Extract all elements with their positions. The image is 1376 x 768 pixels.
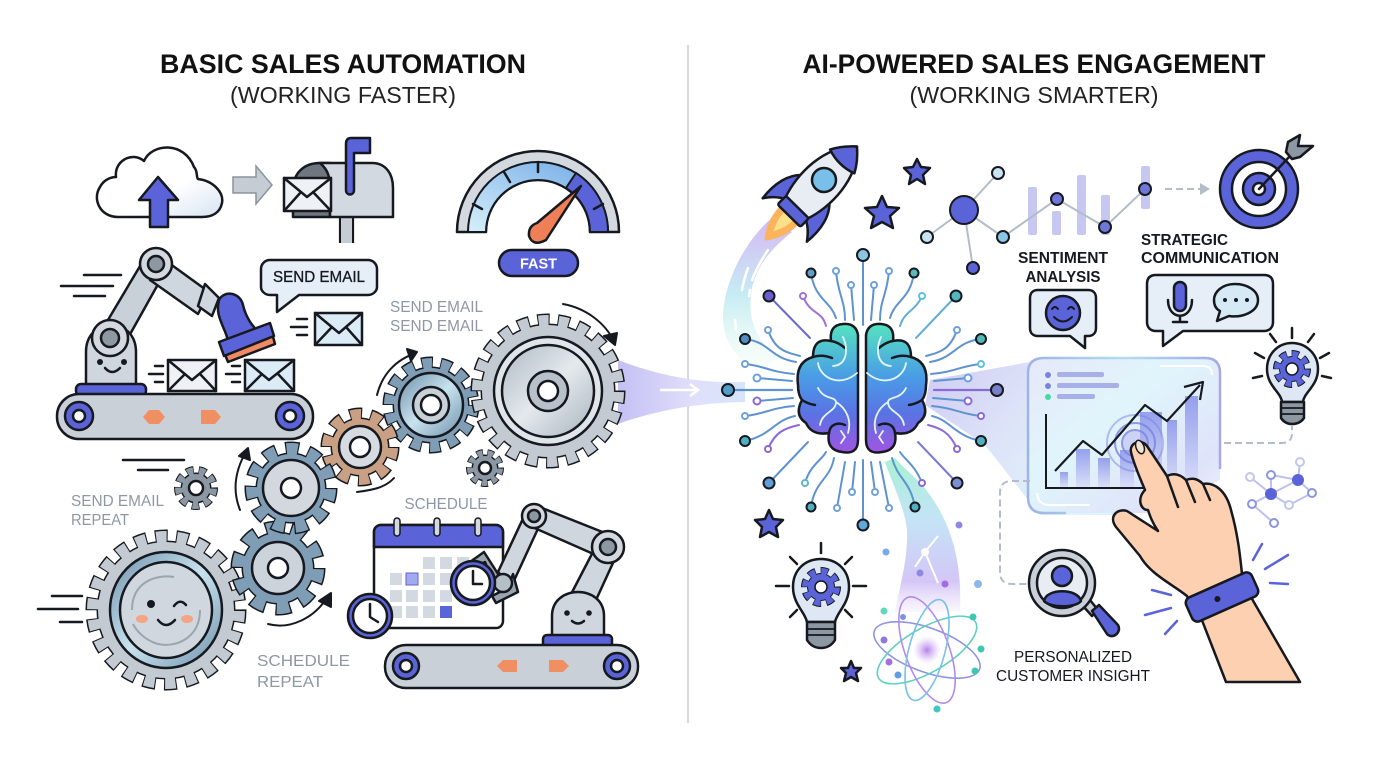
gear: large top [478, 321, 618, 461]
label: personalized customer insight: PERSONALIZED [1014, 649, 1132, 666]
right column title: (WORKING SMARTER) [910, 82, 1158, 108]
label: strategic communication: STRATEGIC [1141, 232, 1228, 249]
label: send email repeat: SEND EMAIL [71, 493, 164, 510]
right column title: AI-POWERED SALES ENGAGEMENT [802, 49, 1266, 79]
arm segments [102, 256, 166, 345]
left column title [160, 49, 526, 108]
calendar [374, 518, 503, 628]
wristband [1184, 570, 1260, 624]
label: send email repeated: SEND EMAIL [390, 299, 483, 316]
speech bubble: send email [261, 260, 377, 312]
dashed arrow [1165, 183, 1210, 195]
dashboard panel [1028, 358, 1220, 513]
gear: medium blue [390, 364, 472, 446]
label: personalized customer insight [996, 649, 1151, 685]
rocket [742, 124, 879, 263]
label: send email repeated: SEND EMAIL [390, 318, 483, 335]
network molecule [1246, 458, 1316, 527]
star 1 [904, 159, 930, 184]
icon: cloud upload [97, 147, 222, 227]
label: sentiment analysis: SENTIMENT [1018, 250, 1109, 267]
icon: pointing hand [1113, 439, 1300, 682]
label: send email repeat [71, 493, 164, 529]
flow to atom [885, 458, 960, 612]
stamp [218, 294, 275, 362]
icon: magnifier person [1029, 550, 1119, 636]
icon: idea bulb left [776, 543, 866, 648]
panel: ai engagement [722, 124, 1331, 712]
icon: idea bulb right [1253, 328, 1331, 424]
label: schedule repeat [257, 653, 350, 691]
flying envelope [291, 313, 362, 345]
envelopes on belt [149, 360, 294, 391]
label: schedule repeat: REPEAT [257, 674, 324, 691]
gear: medium upper [252, 449, 330, 527]
arrow over large gear [563, 304, 617, 345]
flow nodes [915, 536, 938, 583]
speed lines: large gear [38, 596, 82, 622]
clock in gripper [451, 561, 495, 605]
label: schedule: SCHEDULE [404, 496, 488, 513]
label: personalized customer insight: CUSTOMER INSIGHT [996, 668, 1151, 685]
brain circuit rays [722, 249, 1003, 530]
curved arrows around gears [236, 448, 394, 626]
icon: brain [798, 324, 926, 452]
right column title [802, 49, 1266, 108]
right hemisphere [866, 324, 926, 452]
center divider [687, 45, 689, 723]
dashed connector right [1224, 426, 1292, 443]
dashed connector left [1000, 481, 1030, 584]
panel: basic automation [38, 138, 638, 691]
label: sentiment analysis: ANALYSIS [1026, 269, 1100, 286]
robot arm with stamp [61, 248, 275, 396]
label: send email repeat: REPEAT [71, 512, 129, 529]
gear: medium lower [238, 528, 318, 608]
floating dots [882, 522, 982, 588]
icon: sentiment bubble [1030, 290, 1096, 348]
robot arm with gripper [470, 504, 624, 648]
label: sentiment analysis [1018, 250, 1109, 286]
icon: speedometer [457, 151, 619, 243]
beam: gears to brain [618, 360, 745, 424]
conveyor belt [57, 394, 313, 439]
icon: mailbox [284, 138, 393, 243]
left column title: BASIC SALES AUTOMATION [160, 49, 526, 79]
trend line [1055, 382, 1203, 471]
gear: small left [180, 472, 212, 504]
icon: atom [867, 590, 987, 712]
network graph with bars [921, 166, 1151, 274]
gear: face [94, 538, 238, 682]
icon: target [1220, 135, 1313, 228]
left hemisphere [798, 324, 858, 452]
star 3 [755, 510, 783, 537]
icon: communication bubble [1147, 275, 1273, 346]
star 2 [865, 196, 899, 228]
icon: gray arrow [233, 166, 272, 204]
star 4 [841, 661, 861, 681]
label: send email repeated [390, 299, 483, 335]
label: schedule repeat: SCHEDULE [257, 653, 350, 670]
left column title: (WORKING FASTER) [230, 82, 456, 108]
motion lines around wrist [1145, 544, 1288, 634]
body [86, 325, 136, 396]
speed lines [61, 275, 121, 296]
beam: brain to dashboard [925, 362, 1120, 515]
conveyor belt lower [385, 645, 638, 688]
badge: fast: FAST [520, 256, 557, 272]
gear: small right [471, 454, 499, 482]
needle [529, 186, 581, 243]
label: strategic communication [1141, 232, 1279, 267]
ripple rings [1107, 415, 1163, 471]
rocket exhaust trail [723, 218, 792, 372]
chart bars [1060, 396, 1198, 487]
chart axes [1046, 414, 1150, 488]
gripper claws [470, 552, 500, 584]
gear: copper [328, 414, 392, 480]
speech bubble: send email: SEND EMAIL [273, 269, 365, 286]
speed lines: small gear [123, 460, 184, 470]
label: strategic communication: COMMUNICATION [1141, 250, 1279, 267]
badge: fast [499, 250, 578, 276]
arrow around medium gear [377, 349, 417, 395]
clock left [348, 594, 392, 638]
